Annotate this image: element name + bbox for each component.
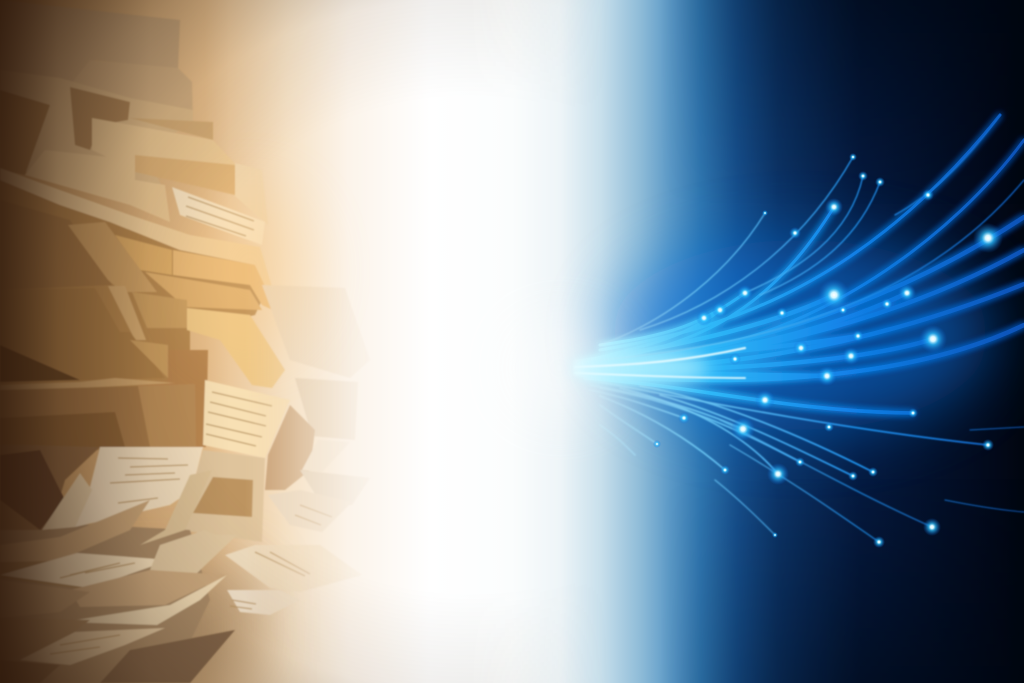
paper pile — [0, 0, 370, 683]
white-hot fiber core — [575, 348, 745, 378]
soft floor shadow under the pile — [0, 570, 250, 683]
thin upper and lower strands — [590, 115, 1024, 542]
long lower bright strand — [585, 378, 913, 413]
light points at fiber tips — [653, 153, 1003, 548]
fiber optic bands with glow — [575, 115, 1024, 413]
warm and dim lighting over the paper — [0, 0, 558, 683]
loose sheets — [0, 445, 362, 683]
main stack — [0, 168, 370, 542]
glowing fiber origin — [515, 328, 710, 408]
document text lines — [50, 197, 332, 654]
thick bright bundle — [575, 115, 1024, 380]
upper faded sheets — [21, 14, 264, 244]
blue ambient glow — [610, 240, 990, 430]
